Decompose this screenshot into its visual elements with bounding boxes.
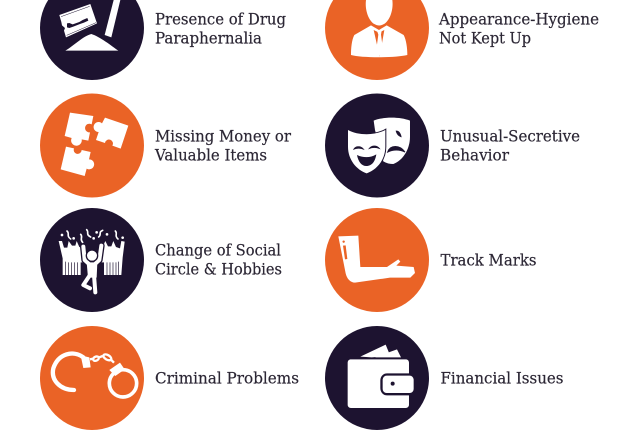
panel: Financial Issues	[325, 326, 564, 430]
label: Presence of Drug	[155, 10, 286, 28]
label: Paraphernalia	[155, 28, 262, 48]
label: Appearance-Hygiene	[438, 10, 599, 28]
label: Valuable Items	[154, 146, 267, 164]
icon: razor blade and powder	[40, 0, 144, 80]
label: Track Marks	[440, 250, 536, 270]
label: Not Kept Up	[439, 28, 531, 48]
label: Financial Issues	[440, 368, 564, 388]
label: Behavior	[440, 146, 509, 164]
label: Circle & Hobbies	[155, 260, 282, 278]
label: Missing Money or	[155, 126, 291, 146]
panel: Missing Money or Valuable Items	[40, 94, 291, 198]
icon: arm with track marks	[325, 208, 429, 312]
label: Unusual-Secretive	[440, 126, 580, 146]
icon: wallet	[325, 326, 429, 430]
icon: dancing crowd	[40, 208, 144, 312]
icon: puzzle pieces	[40, 94, 144, 198]
panel: Appearance-Hygiene Not Kept Up	[325, 0, 599, 80]
panel: Change of Social Circle & Hobbies	[40, 208, 282, 312]
icon: handcuffs	[40, 326, 144, 430]
label: Criminal Problems	[155, 368, 299, 388]
panel: Presence of Drug Paraphernalia	[40, 0, 286, 80]
panel: Criminal Problems	[40, 326, 299, 430]
icon: man in suit	[325, 0, 429, 80]
label: Change of Social	[155, 240, 281, 260]
icon: theatre masks	[325, 94, 429, 198]
panel: Track Marks	[325, 208, 536, 312]
panel: Unusual-Secretive Behavior	[325, 94, 580, 198]
